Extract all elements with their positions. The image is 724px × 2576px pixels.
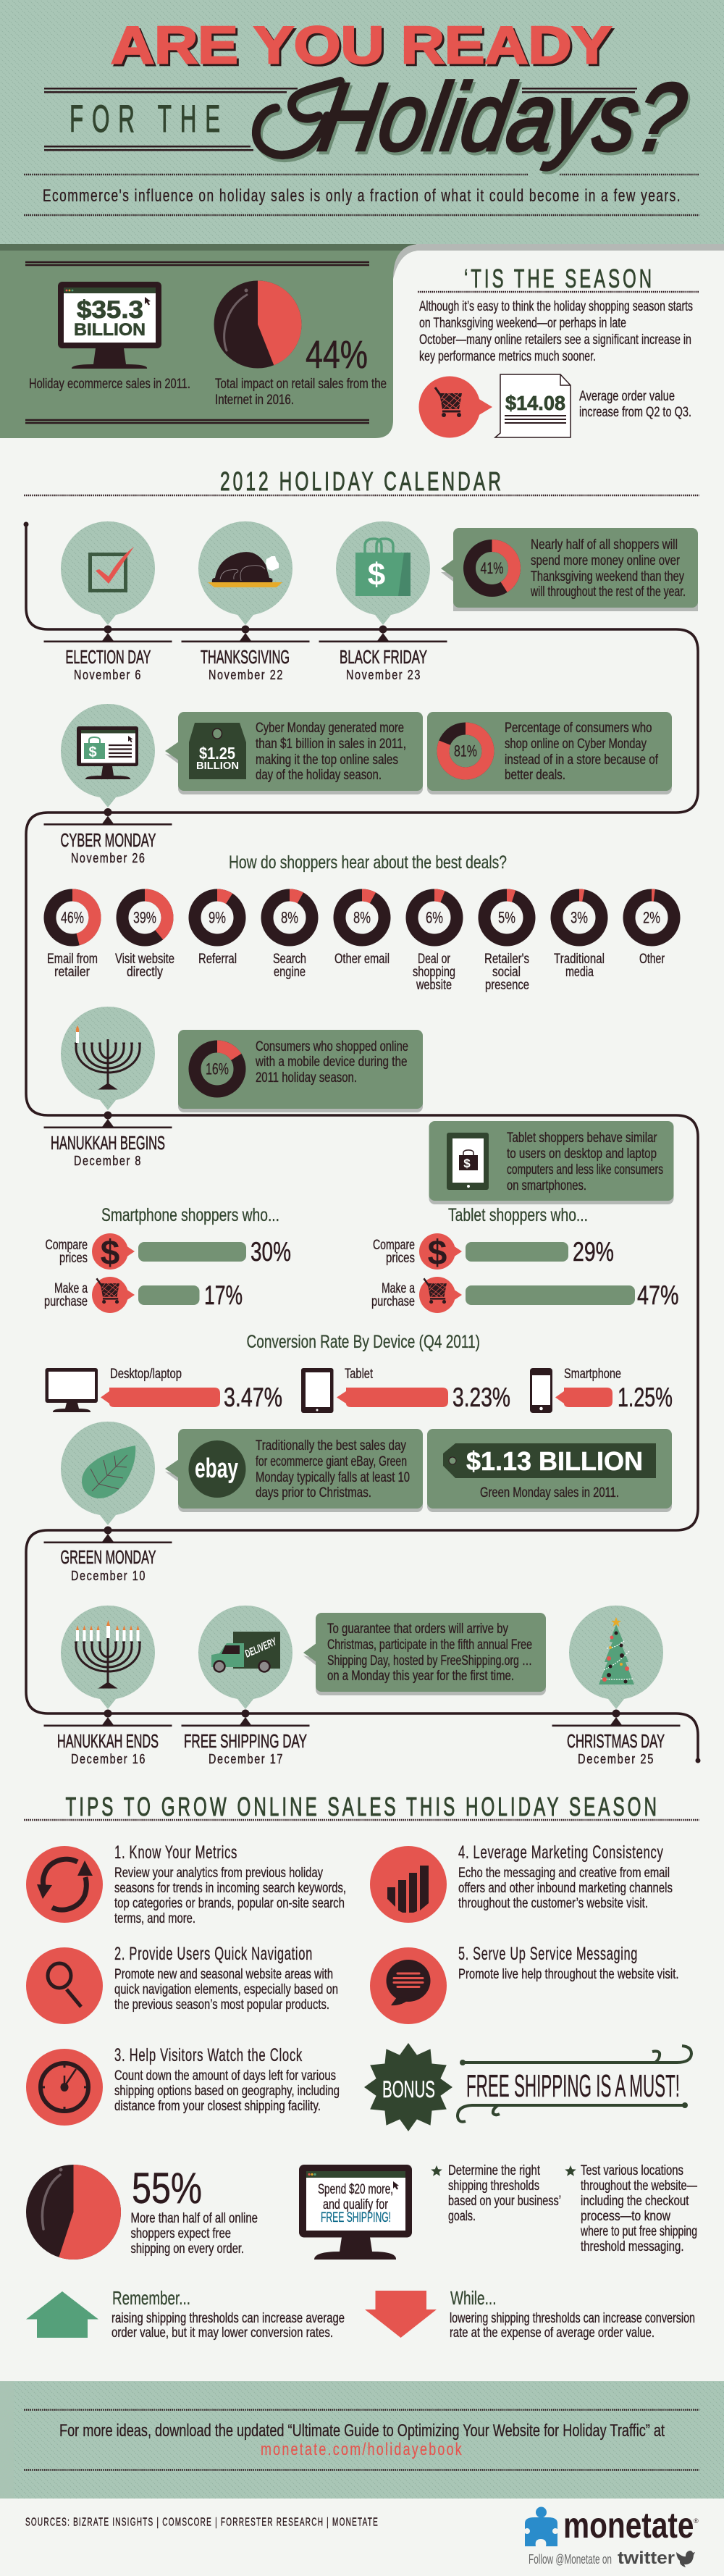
- heading: how do shoppers hear: How do shoppers hear about the best deals?: [229, 852, 507, 873]
- chart: conversion rate by device: [45, 1332, 673, 1413]
- milestone: thanksgiving: [181, 521, 310, 682]
- follow on twitter: [529, 2548, 695, 2568]
- text: 41 percent: [530, 537, 686, 600]
- text: tip 1: Review your analytics from previous holiday: [114, 1866, 323, 1881]
- text: 81 percent: [505, 721, 659, 783]
- bar: tablet: 3.23%: [452, 1383, 510, 1412]
- remember: up arrow: raising shipping thresholds can increase average: [111, 2311, 345, 2326]
- milestone: cyber monday: CYBER MONDAY: [61, 829, 156, 851]
- text: tablet shoppers: [507, 1130, 663, 1193]
- list: determine thresholds: shipping thresholds: [448, 2178, 539, 2194]
- donut: traditional media: [554, 895, 605, 980]
- logo: monetate: monetate: [563, 2505, 694, 2546]
- text: tip 2: quick navigation elements, especially based on: [114, 1982, 338, 1997]
- icon: christmas tree: [599, 1617, 634, 1685]
- list: test locations: including the checkout: [581, 2194, 689, 2209]
- text: ebay: Monday typically falls at least 10: [256, 1470, 410, 1485]
- chart: tablet shoppers: Tablet shoppers who...: [448, 1205, 588, 1225]
- icon: monitor free shipping: Spend $20 more,: [318, 2182, 393, 2197]
- chart: tablet shoppers: [371, 1205, 679, 1313]
- text: cyber monday sales: day of the holiday season.: [256, 768, 382, 783]
- milestone: hanukkah ends: HANUKKAH ENDS: [57, 1730, 159, 1752]
- text: 41 percent: spend more money online over: [531, 553, 681, 569]
- icon: price tag: [189, 723, 246, 779]
- icon: speech bubble: [370, 1947, 447, 2024]
- bonus badge: BONUS: [382, 2076, 435, 2102]
- callout: 41 percent: [441, 528, 698, 611]
- text: tip 1: terms, and more.: [114, 1911, 195, 1926]
- icon: monitor with bag: [77, 726, 138, 779]
- milestone: hanukkah ends: December 16: [71, 1752, 146, 1766]
- donut: 41 percent: 41%: [481, 559, 504, 577]
- milestone: green monday: GREEN MONDAY: [61, 1546, 156, 1568]
- text: ebay: [256, 1438, 410, 1501]
- sources: SOURCES: BIZRATE INSIGHTS | COMSCORE | FORRESTER RESEARCH | MONETATE: [25, 2516, 379, 2529]
- bar: compare prices 29 percent: 29%: [573, 1237, 614, 1267]
- callout: tablet shoppers: [429, 1121, 673, 1204]
- text: mobile consumers: 2011 holiday season.: [256, 1070, 357, 1086]
- donut: deal or shopping website: Deal or: [418, 952, 450, 967]
- text: cyber monday sales: [256, 721, 406, 783]
- text: tip 3: distance from your closest shipping facility.: [114, 2099, 321, 2114]
- icon: menorah lit: [75, 1620, 141, 1688]
- text: ebay: days prior to Christmas.: [256, 1485, 371, 1501]
- text: free shipping: To guarantee that orders will arrive by: [327, 1621, 508, 1637]
- text: total impact: Total impact on retail sales from the: [215, 377, 387, 392]
- donut: traditional media: 3%: [571, 908, 588, 927]
- text: 81 percent: better deals.: [505, 768, 565, 783]
- text: mobile consumers: [255, 1039, 408, 1086]
- link: monetate ebook: monetate.com/holidayebook: [261, 2440, 463, 2459]
- icon: monitor 35.3 billion: BILLION: [74, 320, 146, 340]
- bar: compare prices 30 percent: prices: [59, 1251, 88, 1266]
- panel: ecommerce stats: [0, 244, 724, 438]
- milestone: free shipping day: December 17: [209, 1752, 284, 1766]
- text: tip 1: top categories or brands, popular on-site search: [114, 1896, 345, 1911]
- text: tip 2: 2. Provide Users Quick Navigation: [114, 1944, 313, 1964]
- milestone: election day: [43, 521, 172, 682]
- stat: 55 percent: [130, 2164, 258, 2257]
- donut: 81 percent: 81%: [454, 742, 477, 760]
- icon: monitor free shipping: [299, 2165, 412, 2260]
- milestone: cyber monday: [43, 704, 172, 865]
- pie chart: 44 percent: [214, 281, 301, 368]
- bar: compare prices 30 percent: 30%: [251, 1237, 291, 1267]
- remember: up arrow: Remember...: [112, 2287, 190, 2309]
- icon: tablet with bag: $: [463, 1157, 471, 1170]
- icon: magnifier: [26, 1947, 103, 2024]
- text: cyber monday sales: making it the top online sales: [256, 752, 398, 768]
- donut: deal or shopping website: 6%: [426, 908, 443, 927]
- follow on twitter: twitter: [618, 2548, 675, 2568]
- text: tip 1: seasons for trends in incoming search keywords,: [114, 1881, 346, 1896]
- bar: compare prices 29 percent: Compare: [373, 1238, 415, 1253]
- icon: receipt 14.08: $14.08: [505, 392, 565, 414]
- panel: footer call to action: [0, 2381, 724, 2499]
- donut: referral: [195, 895, 240, 967]
- text: tip 3: Count down the amount of days left for various: [114, 2068, 336, 2084]
- donut: other: 2%: [643, 908, 660, 927]
- text: cyber monday sales: Cyber Monday generated more: [256, 721, 404, 736]
- donut: 41 percent: [469, 546, 514, 591]
- milestone: cyber monday: November 26: [71, 851, 146, 865]
- list: determine thresholds: [431, 2163, 561, 2224]
- text: tip 3: [114, 2045, 340, 2114]
- donut: other email: [334, 895, 390, 967]
- heading: 2012 holiday calendar: 2012 HOLIDAY CALENDAR: [220, 466, 504, 496]
- donut: search engine: 8%: [281, 908, 298, 927]
- text: ebay: Traditionally the best sales day: [256, 1438, 406, 1453]
- milestone: thanksgiving: THANKSGIVING: [201, 646, 290, 668]
- text: 41 percent: Nearly half of all shoppers will: [531, 537, 678, 553]
- bar: compare prices 29 percent: [373, 1233, 614, 1272]
- donut: referral: Referral: [198, 952, 237, 967]
- milestone: hanukkah begins: [43, 1007, 172, 1168]
- donut: 16 percent: [195, 1046, 240, 1091]
- text: tablet shoppers: to users on desktop and laptop: [507, 1146, 657, 1162]
- bar: smartphone: 1.25%: [618, 1383, 673, 1412]
- icon: delivery truck: DELIVERY: [243, 1635, 279, 1661]
- remember: up arrow: order value, but it may lower conversion rates.: [111, 2325, 333, 2341]
- milestone: election day: ELECTION DAY: [65, 646, 151, 668]
- donut: other email: Other email: [334, 952, 390, 967]
- text: free shipping: on a Monday this year for the first time.: [327, 1669, 514, 1684]
- donut: retailer's social presence: presence: [485, 978, 529, 993]
- list: determine thresholds: Determine the right: [448, 2163, 541, 2178]
- text: tip 3: 3. Help Visitors Watch the Clock: [114, 2045, 303, 2065]
- bar: make a purchase 47 percent: 47%: [637, 1280, 679, 1310]
- list: test locations: Test various locations: [581, 2163, 683, 2178]
- bar: smartphone: [530, 1367, 673, 1413]
- donut: deal or shopping website: [412, 895, 457, 993]
- while: down arrow: rate at the expense of average order value.: [450, 2325, 654, 2341]
- icon: monitor 35.3 billion: $35.3: [77, 296, 143, 324]
- text: tablet shoppers: Tablet shoppers behave similar: [507, 1130, 657, 1146]
- bar: compare prices 30 percent: Compare: [45, 1238, 88, 1253]
- chart: smartphone shoppers: [44, 1205, 291, 1313]
- text: tip 1: 1. Know Your Metrics: [114, 1842, 237, 1863]
- donut: email from retailer: 46%: [61, 908, 84, 927]
- donut: other: Other: [639, 952, 665, 967]
- bar: make a purchase 17 percent: purchase: [44, 1294, 88, 1309]
- chart: conversion rate by device: Conversion Rate By Device (Q4 2011): [246, 1332, 480, 1352]
- donut: deal or shopping website: shopping: [413, 965, 455, 980]
- while: down arrow: [365, 2287, 695, 2341]
- title: for the: FOR THE: [70, 98, 229, 140]
- donut: search engine: Search: [273, 952, 306, 967]
- donut: other: [629, 895, 674, 967]
- remember: up arrow: [26, 2287, 345, 2341]
- tip 5: service messaging: [370, 1944, 679, 2024]
- icon: cart badge: [418, 377, 492, 437]
- icon: monitor with bag: $: [88, 744, 97, 760]
- list: test locations: threshold messaging.: [581, 2239, 683, 2254]
- panel: header: [0, 0, 724, 244]
- milestone: green monday: [43, 1422, 172, 1583]
- icon: menorah one candle: [75, 1025, 141, 1089]
- milestone: christmas day: [552, 1606, 681, 1766]
- logo: monetate: ®: [694, 2517, 699, 2525]
- icon: price tag: $1.25: [199, 744, 235, 763]
- icon: monitor free shipping: FREE SHIPPING!: [321, 2210, 391, 2225]
- text: season paragraph: key performance metrics much sooner.: [419, 349, 596, 364]
- milestone: free shipping day: [181, 1606, 310, 1766]
- icon: turkey: [208, 552, 282, 587]
- stat: 55 percent: shoppers expect free: [130, 2226, 231, 2241]
- icon: clock: [26, 2049, 103, 2126]
- donut: retailer's social presence: Retailer's: [484, 952, 529, 967]
- tip 2: quick navigation: [26, 1944, 338, 2024]
- stat: 55 percent: shipping on every order.: [130, 2241, 244, 2257]
- milestone: green monday: December 10: [71, 1569, 146, 1583]
- text: tip 2: the previous season’s most popular products.: [114, 1997, 329, 2013]
- donut: visit website directly: 39%: [133, 908, 156, 927]
- text: tip 4: [458, 1842, 673, 1911]
- text: 81 percent: shop online on Cyber Monday: [505, 737, 647, 752]
- chart: smartphone shoppers: Smartphone shoppers who...: [101, 1205, 279, 1225]
- donut: email from retailer: Email from: [47, 952, 98, 967]
- text: season paragraph: on Thanksgiving weekend—or perhaps in late: [419, 316, 626, 331]
- milestone: black friday: November 23: [346, 668, 421, 682]
- icon: leaf: [82, 1446, 135, 1498]
- pie chart: 55 percent: [26, 2165, 121, 2260]
- header dotted lines: [24, 175, 699, 215]
- icon: ebay badge: ebay: [195, 1453, 238, 1484]
- stat: 55 percent: More than half of all online: [130, 2211, 258, 2226]
- bar: desktop: Desktop/laptop: [110, 1367, 182, 1382]
- milestone: hanukkah ends: [43, 1606, 172, 1766]
- donut: deal or shopping website: website: [416, 978, 452, 993]
- milestone: hanukkah begins: December 8: [74, 1154, 142, 1168]
- text: tip 4: offers and other inbound marketing channels: [458, 1881, 673, 1896]
- bar: desktop: [45, 1367, 282, 1412]
- donut: retailer's social presence: 5%: [498, 908, 515, 927]
- text: total impact: Internet in 2016.: [215, 393, 294, 408]
- callout: 16 percent mobile: [178, 1030, 423, 1112]
- text: tip 2: [114, 1944, 338, 2013]
- logo: monetate: [524, 2505, 699, 2546]
- bar: compare prices 30 percent: $: [101, 1234, 120, 1272]
- donut: retailer's social presence: [484, 895, 529, 993]
- icon: receipt 14.08: [495, 374, 571, 437]
- text: cyber monday sales: than $1 billion in sales in 2011,: [256, 737, 406, 752]
- donut: visit website directly: [115, 895, 174, 980]
- bar: compare prices 29 percent: prices: [386, 1251, 415, 1266]
- text: holiday ecommerce sales: Holiday ecommerce sales in 2011.: [29, 377, 190, 392]
- text: free shipping: Shipping Day, hosted by FreeShipping.org …: [327, 1653, 532, 1669]
- bar: make a purchase 17 percent: Make a: [54, 1281, 88, 1296]
- text: 81 percent: instead of in a store because of: [505, 752, 659, 768]
- donut: 16 percent: 16%: [206, 1060, 229, 1078]
- callout: free shipping day: [303, 1613, 546, 1695]
- text: tip 2: Promote new and seasonal website areas with: [114, 1967, 333, 1982]
- bar: compare prices 30 percent: [45, 1233, 291, 1272]
- bar: make a purchase 17 percent: [44, 1277, 243, 1313]
- text: tablet shoppers: on smartphones.: [507, 1178, 586, 1193]
- text: tip 3: shipping options based on geography, including: [114, 2084, 340, 2099]
- icon: tablet with bag: [447, 1133, 489, 1190]
- milestone: election day: November 6: [74, 668, 142, 682]
- text: tablet shoppers: computers and less like consumers: [507, 1162, 663, 1178]
- donut: referral: 9%: [209, 908, 226, 927]
- donut: traditional media: media: [565, 965, 594, 980]
- icon: monitor free shipping: and qualify for: [323, 2197, 389, 2212]
- while: down arrow: While...: [450, 2287, 497, 2309]
- banner: free shipping is a must: [458, 2046, 691, 2122]
- text: average order value: increase from Q2 to Q3.: [579, 405, 691, 420]
- icon: bar chart: [370, 1846, 447, 1923]
- donut: 81 percent: [443, 729, 488, 773]
- follow on twitter: Follow @Monetate on: [529, 2552, 612, 2567]
- title: are you ready: ARE YOU READY: [111, 17, 612, 75]
- icon: shopping bag: $: [368, 557, 385, 592]
- milestone: christmas day: December 25: [578, 1752, 654, 1766]
- text: total impact: [215, 377, 387, 408]
- icon: tag banner: $1.13 BILLION: [466, 1446, 643, 1476]
- bar: compare prices 29 percent: $: [428, 1234, 447, 1272]
- text: free shipping: [327, 1621, 532, 1684]
- list: test locations: process—to know: [581, 2209, 670, 2224]
- text: mobile consumers: Consumers who shopped online: [256, 1039, 408, 1054]
- text: ebay: for ecommerce giant eBay, Green: [256, 1454, 407, 1469]
- donut: search engine: [267, 895, 312, 980]
- bar: desktop: 3.47%: [224, 1383, 282, 1412]
- tip 1: know your metrics: [26, 1842, 346, 1926]
- icon: shopping bag: [355, 539, 411, 596]
- list: determine thresholds: based on your business’: [448, 2194, 561, 2209]
- text: tip 5: [458, 1944, 679, 1982]
- donut: retailer's social presence: social: [492, 965, 521, 980]
- text: green monday sales: Green Monday sales in 2011.: [480, 1485, 619, 1501]
- milestone: christmas day: CHRISTMAS DAY: [567, 1730, 665, 1752]
- text: tip 4: Echo the messaging and creative from email: [458, 1866, 670, 1881]
- bar: tablet: Tablet: [345, 1367, 374, 1382]
- list: test locations: [565, 2163, 697, 2254]
- bar: make a purchase 47 percent: [371, 1277, 679, 1313]
- text: free shipping: Christmas, participate in the fifth annual Free: [327, 1637, 532, 1653]
- milestone: hanukkah begins: HANUKKAH BEGINS: [51, 1132, 165, 1154]
- text: average order value: [579, 389, 691, 420]
- text: 81 percent: Percentage of consumers who: [505, 721, 652, 736]
- bar: make a purchase 47 percent: purchase: [371, 1294, 415, 1309]
- donut: search engine: engine: [274, 965, 306, 980]
- list: determine thresholds: goals.: [448, 2209, 476, 2224]
- panel: tis the season: [418, 264, 699, 437]
- bar: smartphone: Smartphone: [564, 1367, 621, 1382]
- tip 3: watch the clock: [26, 2045, 340, 2126]
- stat: 55 percent: 55%: [132, 2164, 202, 2212]
- milestone: black friday: [319, 521, 447, 682]
- tip 4: marketing consistency: [370, 1842, 673, 1923]
- donut: visit website directly: Visit website: [115, 952, 174, 967]
- donut: email from retailer: [47, 895, 98, 980]
- milestone: black friday: BLACK FRIDAY: [340, 646, 427, 668]
- callout: 81 percent: [427, 712, 672, 794]
- callout: 1.13 billion: [427, 1429, 672, 1512]
- text: tip 1: [114, 1842, 346, 1926]
- timeline path: [23, 521, 701, 1763]
- milestone: thanksgiving: November 22: [209, 668, 284, 682]
- text: mobile consumers: with a mobile device during the: [255, 1054, 407, 1070]
- text: tip 4: throughout the customer’s website visit.: [458, 1896, 648, 1911]
- bar: make a purchase 17 percent: 17%: [204, 1280, 243, 1310]
- donut: traditional media: Traditional: [554, 952, 605, 967]
- callout: 1.25 billion: [165, 712, 423, 794]
- bar: make a purchase 47 percent: Make a: [382, 1281, 415, 1296]
- callout: ebay: [165, 1429, 423, 1512]
- icon: price tag: BILLION: [196, 760, 239, 772]
- icon: sync arrows: [26, 1846, 103, 1923]
- milestone: free shipping day: FREE SHIPPING DAY: [184, 1730, 307, 1752]
- text: season paragraph: [419, 299, 693, 364]
- icon: ebay badge: [188, 1440, 246, 1498]
- stat: 44 percent: 44%: [306, 333, 368, 377]
- text: average order value: Average order value: [579, 389, 675, 404]
- icon: delivery truck: [211, 1632, 280, 1671]
- bonus badge: [364, 2043, 452, 2131]
- donut: visit website directly: directly: [127, 965, 163, 980]
- icon: monitor 35.3 billion: [58, 282, 161, 369]
- bar: tablet: [301, 1367, 510, 1413]
- icon: checkbox: [90, 547, 134, 591]
- donut: email from retailer: retailer: [54, 965, 90, 980]
- donut chart: deal sources: [47, 895, 674, 993]
- donut: other email: 8%: [353, 908, 371, 927]
